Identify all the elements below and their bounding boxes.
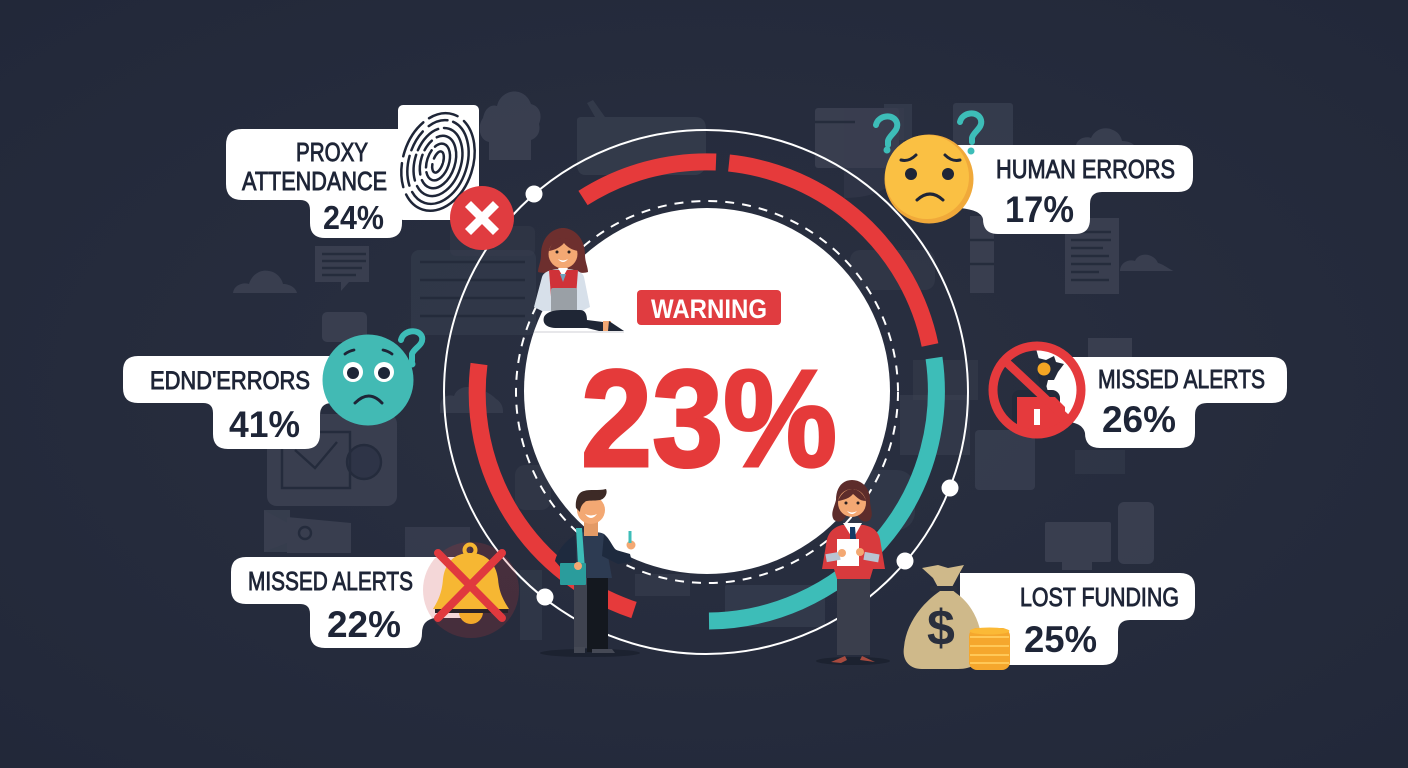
icon: crossed bell bbox=[423, 542, 519, 638]
label: HUMAN ERRORS bbox=[996, 154, 1175, 184]
label: MISSED ALERTS bbox=[248, 566, 413, 596]
figure: man with bag bbox=[540, 489, 640, 657]
callout: proxy attendance: 24% bbox=[323, 199, 384, 236]
callout: missed alerts left bbox=[231, 542, 519, 648]
callout: lost funding bbox=[904, 565, 1195, 670]
icon details in background bbox=[282, 122, 1111, 539]
outer thin ring bbox=[444, 130, 968, 654]
ring nodes bbox=[526, 186, 958, 606]
label: MISSED ALERTS bbox=[1098, 364, 1265, 394]
callout: missed alerts left: 22% bbox=[327, 604, 401, 645]
red arc: top left bbox=[583, 162, 716, 198]
icon: red cross bbox=[450, 186, 514, 250]
icon: coin stack bbox=[969, 628, 1010, 670]
red arc: top right bbox=[729, 163, 930, 345]
figure: seated woman bbox=[534, 228, 624, 333]
label: EDND'ERRORS bbox=[150, 367, 310, 395]
icon: sad yellow face bbox=[876, 113, 981, 224]
faint background icons bbox=[233, 91, 1174, 640]
callout: edn errors: 41% bbox=[229, 404, 300, 445]
callout: missed alerts right: 26% bbox=[1102, 399, 1176, 440]
callout: edn errors bbox=[123, 331, 422, 449]
icon: money bag: $ bbox=[927, 600, 955, 656]
icon: money bag bbox=[904, 565, 982, 669]
callout: proxy attendance: ATTENDANCE bbox=[242, 166, 387, 196]
label: LOST FUNDING bbox=[1020, 582, 1179, 612]
callout: human errors bbox=[876, 113, 1193, 234]
label: PROXY bbox=[296, 137, 368, 167]
red arc: left bbox=[477, 364, 634, 610]
central white circle bbox=[524, 208, 890, 574]
icon: worried teal face bbox=[322, 331, 422, 426]
icon: prohibited alarm bbox=[993, 345, 1090, 435]
callout: lost funding: 25% bbox=[1024, 619, 1097, 660]
icon: fingerprint bbox=[389, 104, 487, 220]
warning badge: WARNING bbox=[651, 294, 767, 324]
callout: human errors: 17% bbox=[1005, 189, 1074, 230]
figure: woman with paper bbox=[816, 480, 890, 665]
progress arcs bbox=[477, 162, 936, 621]
dashed ring bbox=[516, 201, 898, 583]
teal arc: right bbox=[709, 358, 936, 621]
callout: missed alerts right bbox=[993, 345, 1287, 448]
callout: proxy attendance bbox=[226, 104, 514, 250]
main percentage: 23% bbox=[581, 342, 837, 496]
